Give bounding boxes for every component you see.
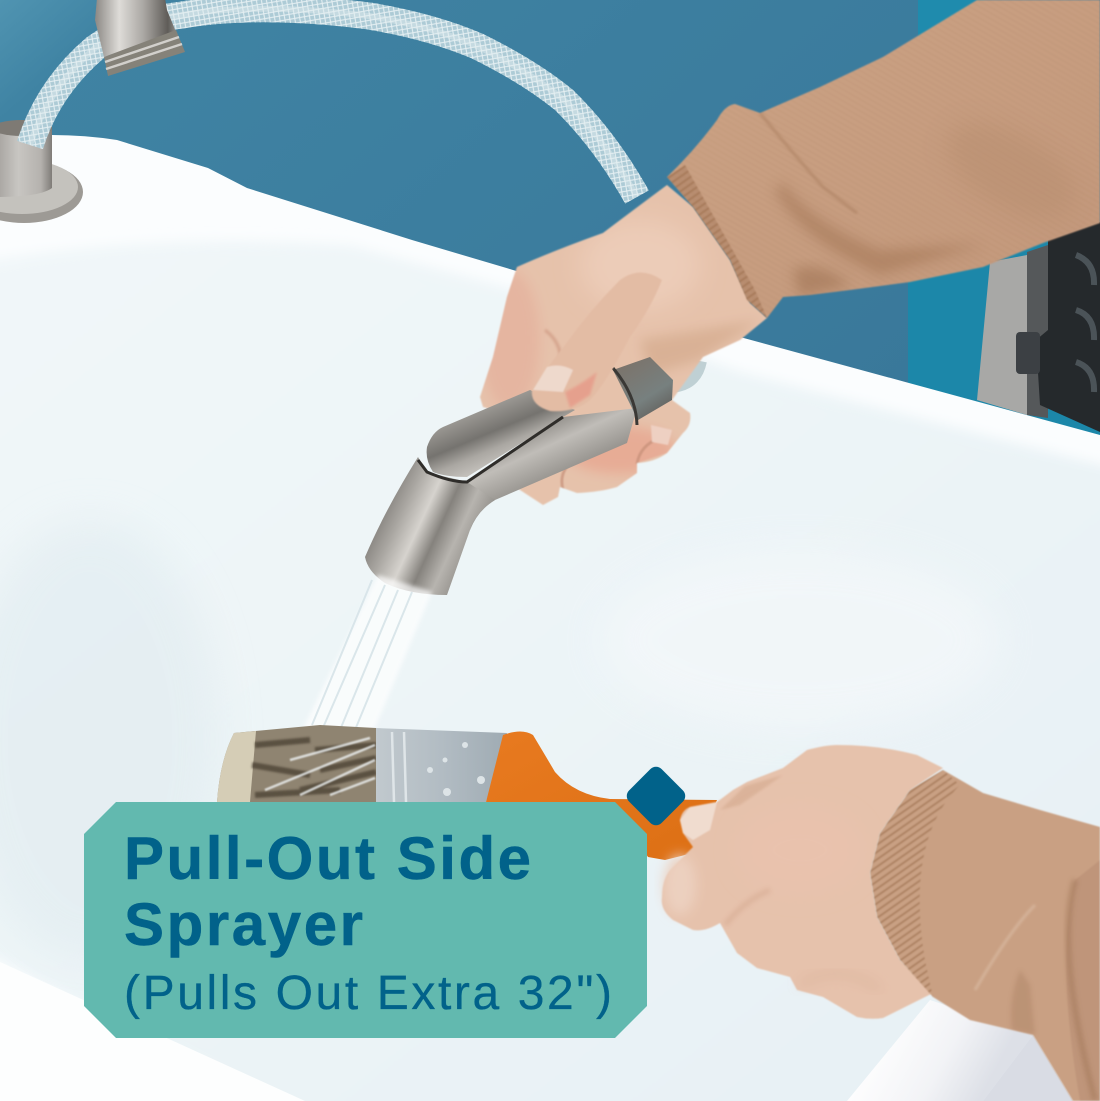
hose entering sprayer: [660, 360, 695, 381]
background wall: [0, 0, 1100, 480]
cuff ribbing: [667, 165, 767, 318]
grey frame and dark object at right: [977, 222, 1100, 432]
sink basin: [0, 241, 1100, 1101]
label heading: [124, 825, 531, 958]
lower hand: [662, 745, 943, 1019]
front right sink rim: [847, 1000, 1073, 1101]
hose connector: [95, 0, 185, 76]
faucet base: [0, 120, 83, 223]
thumb on sprayer: [532, 272, 662, 411]
label heading: Sprayer: [124, 891, 363, 958]
sprayer head: [365, 357, 673, 595]
front left sink rim: [0, 962, 305, 1101]
label subheading: (Pulls Out Extra 32"): [124, 967, 612, 1020]
callout diamond marker: [623, 763, 689, 829]
water spray: [300, 575, 432, 735]
lower sweater sleeve: [870, 770, 1100, 1101]
flexible hose: [30, 9, 637, 197]
hand holding sprayer: [480, 185, 767, 505]
label panel: [84, 802, 647, 1038]
basin shading: [0, 520, 1000, 960]
paint brush: [217, 725, 717, 860]
label heading: Pull-Out Side: [124, 825, 531, 892]
upper sweater sleeve: [650, 0, 1100, 330]
